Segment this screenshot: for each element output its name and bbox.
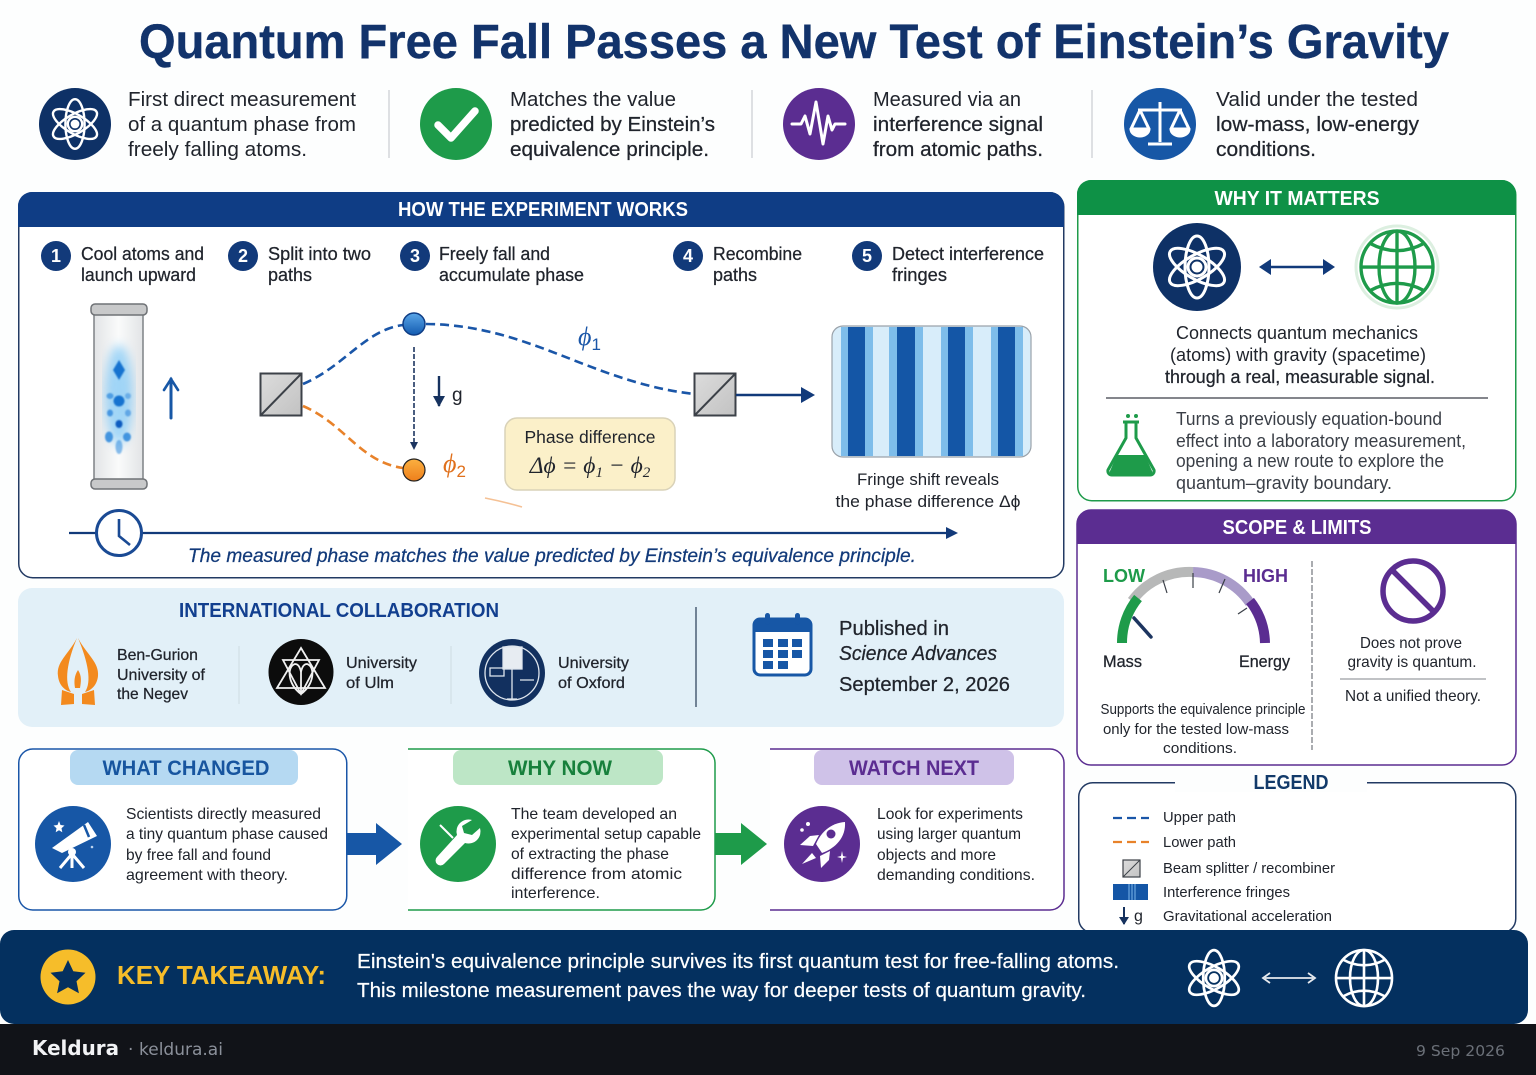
- pill heading: [814, 750, 1014, 785]
- key takeaway band: [0, 930, 1528, 1024]
- Oxford name: University: [558, 655, 629, 672]
- interference fringes: [832, 326, 1031, 511]
- panel: how the experiment works: [18, 192, 1064, 578]
- step 4: 4: [683, 246, 693, 266]
- upper path: [303, 324, 694, 394]
- summary row: [39, 88, 1419, 161]
- logo: University of Oxford: [479, 639, 545, 707]
- phase label phi 1: ϕ: [578, 322, 591, 351]
- panel: why now: [408, 749, 715, 910]
- phase difference callout: [505, 418, 675, 490]
- icon: wrench: [420, 806, 496, 882]
- phase label phi 2: ϕ: [443, 449, 456, 478]
- measurement text: effect into a laboratory measurement,: [1176, 431, 1466, 451]
- limits text: Does not prove: [1360, 635, 1462, 652]
- scope note: conditions.: [1163, 740, 1237, 757]
- step 2: 2: [238, 246, 248, 266]
- legend: lower path: [1113, 834, 1236, 851]
- icon: calendar: [754, 613, 811, 675]
- what changed text: agreement with theory.: [126, 867, 288, 884]
- summary item: validity conditions: conditions.: [1216, 139, 1316, 161]
- what changed text: by free fall and found: [126, 847, 271, 864]
- takeaway text: Einstein's equivalence principle survives its first quantum test for free-falling atoms.: [357, 951, 1119, 973]
- pill heading: WHY NOW: [508, 757, 612, 780]
- measurement text: opening a new route to explore the: [1176, 451, 1444, 471]
- pill heading: [70, 750, 298, 785]
- collaboration heading: INTERNATIONAL COLLABORATION: [179, 600, 499, 622]
- recombiner: [694, 374, 736, 416]
- step 2: paths: [268, 265, 312, 285]
- watch next text: Look for experiments: [877, 806, 1023, 823]
- panel header: SCOPE & LIMITS: [1222, 517, 1372, 539]
- panel: legend: [1079, 770, 1516, 933]
- panel: international collaboration: [18, 588, 1064, 727]
- measurement text: quantum–gravity boundary.: [1176, 473, 1392, 493]
- icon: atom: [1184, 950, 1244, 1006]
- upper atom: [403, 313, 425, 335]
- legend: gravity: g: [1134, 908, 1143, 925]
- summary item: validity conditions: [1124, 88, 1419, 161]
- summary item: validity conditions: low-mass, low-energy: [1216, 114, 1419, 136]
- connection text: [1165, 323, 1435, 387]
- panel: what changed: [19, 749, 347, 910]
- arrow: launch upward: [164, 379, 178, 418]
- gauge: Mass: [1103, 652, 1142, 671]
- watch next text: demanding conditions.: [877, 867, 1035, 884]
- watch next text: [877, 806, 1035, 884]
- conclusion caption: The measured phase matches the value predicted by Einstein’s equivalence principle.: [188, 546, 916, 567]
- site: keldura.ai: [139, 1040, 223, 1060]
- legend: upper path: [1113, 809, 1236, 826]
- why now text: difference from atomic: [511, 866, 682, 883]
- panel header: WHY IT MATTERS: [1214, 188, 1380, 210]
- icon: atom: [1153, 223, 1241, 311]
- limits text: gravity is quantum.: [1348, 654, 1476, 671]
- summary item: interference signal: from atomic paths.: [873, 139, 1043, 161]
- legend: beam splitter: Beam splitter / recombiner: [1163, 860, 1335, 877]
- legend: fringes: Interference fringes: [1163, 884, 1290, 901]
- pill heading: WATCH NEXT: [849, 757, 979, 780]
- arrow: to detector: [736, 387, 815, 403]
- watch next text: using larger quantum: [877, 826, 1021, 843]
- step 2: Split into two: [268, 244, 371, 264]
- connection text: Connects quantum mechanics: [1176, 323, 1418, 343]
- publication details: [839, 618, 1010, 696]
- phase difference callout: Phase difference: [524, 427, 656, 447]
- Ben-Gurion name: Ben-Gurion: [117, 647, 198, 664]
- summary item: matches prediction: [420, 88, 715, 161]
- legend: upper path: Upper path: [1163, 809, 1236, 826]
- arrow: blue: [347, 823, 402, 865]
- Oxford name: of Oxford: [558, 675, 625, 692]
- panel: why it matters: [1077, 180, 1516, 501]
- logo: Ben-Gurion: [58, 638, 98, 705]
- Ben-Gurion name: [117, 647, 206, 703]
- gravity arrow: g: [452, 385, 463, 406]
- legend: lower path: Lower path: [1163, 834, 1236, 851]
- scope note: only for the tested low-mass: [1103, 721, 1289, 738]
- why now text: experimental setup capable: [511, 826, 701, 843]
- Ulm name: University: [346, 655, 417, 672]
- measurement text: Turns a previously equation-bound: [1176, 409, 1442, 429]
- legend: gravity: Gravitational acceleration: [1163, 908, 1332, 925]
- gauge: Energy: [1239, 652, 1290, 671]
- site: ·: [128, 1040, 133, 1060]
- summary item: interference signal: Measured via an: [873, 89, 1021, 111]
- summary item: matches prediction: Matches the value: [510, 89, 676, 111]
- gravity drop line: [410, 347, 418, 450]
- phase difference callout: 2: [643, 465, 651, 481]
- phase label phi 2: 2: [456, 462, 466, 481]
- step 2: [228, 241, 371, 285]
- icon: telescope: [35, 806, 111, 882]
- icon: flask: [1108, 414, 1154, 475]
- gauge: HIGH: [1243, 566, 1288, 586]
- phase label phi 1: 1: [591, 335, 601, 354]
- why now text: of extracting the phase: [511, 846, 669, 863]
- interference fringes: the phase difference Δϕ: [836, 493, 1020, 511]
- icon: star badge: [40, 950, 96, 1004]
- icon: rocket: [784, 806, 860, 882]
- footer bar: [0, 1024, 1536, 1075]
- icon: globe: [1336, 950, 1392, 1006]
- limits text: [1340, 635, 1486, 705]
- step 1: [41, 241, 204, 285]
- step 1: 1: [51, 246, 61, 266]
- arrow: connects: [1263, 973, 1315, 983]
- pill heading: [453, 750, 663, 785]
- why now text: interference.: [511, 885, 600, 902]
- phase difference callout: Δϕ = ϕ: [530, 453, 595, 479]
- step 3: accumulate phase: [439, 265, 584, 285]
- gauge: [1103, 566, 1290, 671]
- what changed text: Scientists directly measured: [126, 806, 321, 823]
- scope note: [1100, 701, 1306, 757]
- step 4: [673, 241, 802, 285]
- panel header: HOW THE EXPERIMENT WORKS: [398, 199, 688, 221]
- takeaway text: This milestone measurement paves the way for deeper tests of quantum gravity.: [357, 980, 1086, 1002]
- gravity arrow: [433, 376, 463, 407]
- step 1: Cool atoms and: [81, 244, 204, 264]
- summary item: first direct measurement: [39, 88, 356, 161]
- icon: prohibition: [1383, 561, 1443, 621]
- timeline: [69, 510, 958, 556]
- logo: University of Ulm: [268, 639, 334, 705]
- summary item: matches prediction: predicted by Einstein’s: [510, 114, 715, 136]
- scope note: Supports the equivalence principle: [1100, 701, 1306, 718]
- lower path: [303, 406, 403, 468]
- panel: scope and limits: [1077, 510, 1516, 765]
- step 3: 3: [410, 246, 420, 266]
- arrow: green: [715, 823, 767, 865]
- icon: globe: [1356, 226, 1438, 308]
- Ulm name: of Ulm: [346, 675, 394, 692]
- summary item: interference signal: interference signal: [873, 114, 1043, 136]
- what changed text: a tiny quantum phase caused: [126, 826, 328, 843]
- step 1: launch upward: [81, 265, 196, 285]
- connection text: through a real, measurable signal.: [1165, 367, 1435, 387]
- phase difference callout: − ϕ: [603, 453, 643, 479]
- interference fringes: Fringe shift reveals: [857, 471, 999, 489]
- step 4: Recombine: [713, 244, 802, 264]
- summary item: interference signal: [783, 88, 1043, 161]
- watch next text: objects and more: [877, 847, 996, 864]
- step 3: [400, 241, 584, 285]
- pill heading: WHAT CHANGED: [102, 757, 270, 780]
- panel: watch next: [770, 749, 1064, 910]
- publication details: Published in: [839, 618, 949, 640]
- why now text: The team developed an: [511, 806, 677, 823]
- step 5: fringes: [892, 265, 947, 285]
- panel header: [1077, 510, 1516, 544]
- phase difference callout: 1: [595, 465, 603, 481]
- Ben-Gurion name: University of: [117, 667, 206, 684]
- why now text: [511, 806, 701, 902]
- legend heading: LEGEND: [1254, 772, 1328, 794]
- date: 9 Sep 2026: [1416, 1042, 1505, 1060]
- beam splitter: [260, 374, 302, 416]
- lower atom: [403, 459, 425, 481]
- summary item: validity conditions: Valid under the tested: [1216, 89, 1418, 111]
- step 5: Detect interference: [892, 244, 1044, 264]
- step 4: paths: [713, 265, 757, 285]
- measurement text: [1176, 409, 1466, 493]
- what changed text: [126, 806, 328, 884]
- panel header: [18, 192, 1064, 227]
- panel header: [1077, 180, 1516, 215]
- summary item: first direct measurement: First direct measurement: [128, 89, 356, 111]
- limits text: Not a unified theory.: [1345, 688, 1481, 705]
- title: Quantum Free Fall Passes a New Test of Einstein’s Gravity: [139, 16, 1449, 69]
- connection text: (atoms) with gravity (spacetime): [1170, 345, 1426, 365]
- publication details: September 2, 2026: [839, 674, 1010, 696]
- step 5: [852, 241, 1044, 285]
- publication details: Science Advances: [839, 643, 997, 665]
- summary item: first direct measurement: freely falling atoms.: [128, 139, 307, 161]
- Oxford name: [558, 655, 629, 692]
- summary item: first direct measurement: of a quantum phase from: [128, 114, 356, 136]
- stray mark: [485, 498, 522, 507]
- takeaway label: KEY TAKEAWAY:: [117, 960, 326, 990]
- Ben-Gurion name: the Negev: [117, 686, 188, 703]
- arrow: connects: [1259, 259, 1335, 275]
- gauge: LOW: [1103, 566, 1145, 586]
- Ulm name: [346, 655, 417, 692]
- step 3: Freely fall and: [439, 244, 550, 264]
- atom tube: [91, 304, 147, 489]
- takeaway text: [357, 951, 1119, 1002]
- step 5: 5: [862, 246, 872, 266]
- summary item: matches prediction: equivalence principle.: [510, 139, 709, 161]
- brand: Keldura: [32, 1036, 119, 1060]
